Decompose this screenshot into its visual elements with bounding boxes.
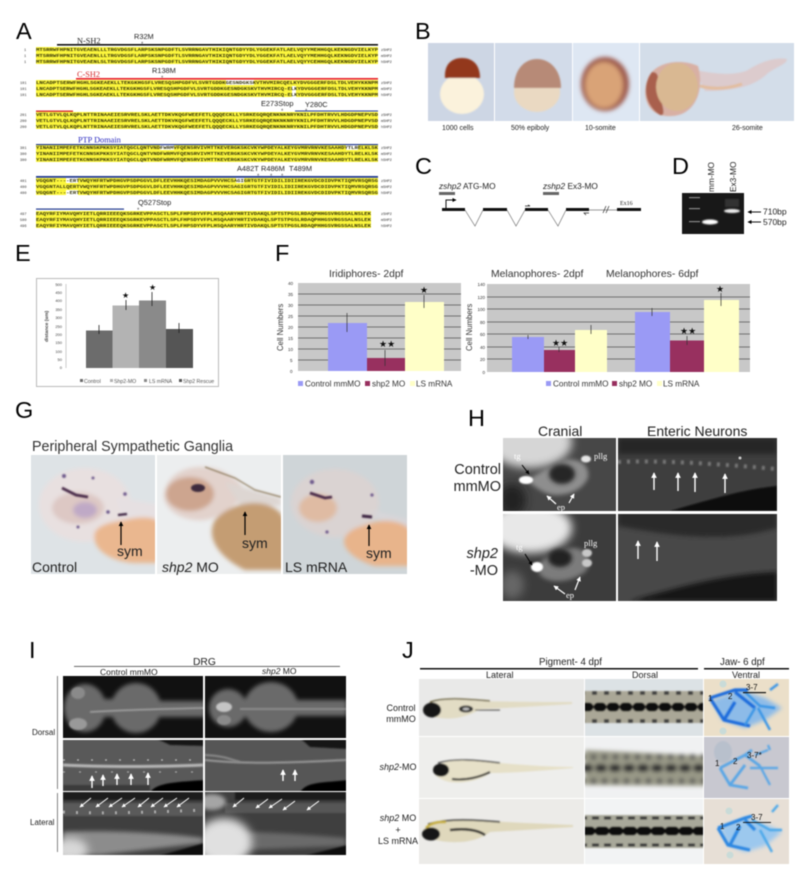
panel A: sequence alignment — [16, 18, 392, 229]
morpholino labels: zshp2 ATG-MO — [438, 181, 496, 191]
morpholino labels: Ex16 — [620, 201, 633, 207]
row labels: LS mRNA — [378, 836, 418, 846]
embryo: 1000 cells — [440, 58, 484, 114]
aligned sequences: YINANIIMPEFETKCNNSKPKKSYIATQGCLQNTVNDFWRMVFQENSRVIVMTTKEVERGKSKCVKYWPDEYALKEYGVMRVRNVKESAAHDYTLRELKLSK — [36, 147, 379, 151]
photo: control lateral — [62, 791, 204, 856]
chart titles: Melanophores- 2dpf — [491, 269, 584, 280]
panel letter J: J — [402, 637, 414, 663]
y axis — [44, 282, 66, 370]
y axis: 200 — [55, 332, 63, 337]
jaw cartilage photo: rescue: 1 — [720, 822, 725, 831]
photo: shp2 MO — [157, 455, 285, 574]
group headings: Ventral — [732, 670, 760, 680]
panel G: peripheral sympathetic ganglia — [15, 397, 412, 575]
group headings: Lateral — [486, 670, 514, 680]
error bars and stars: ★ — [149, 283, 156, 292]
stage captions: 1000 cells — [442, 125, 474, 132]
lateral photos background — [419, 679, 584, 864]
panel I: DRG fluorescence — [29, 637, 348, 866]
error bars and stars: ★ — [122, 291, 129, 300]
chart: Melanophores — [465, 269, 750, 388]
residue numbers — [20, 49, 26, 229]
photo labels: LS mRNA — [285, 559, 348, 575]
species labels: hSHP2 — [381, 191, 392, 196]
mutation stars: * — [305, 109, 308, 115]
mutation labels: Q527Stop — [138, 198, 171, 207]
legend: LS mRNA — [663, 380, 700, 388]
jaw cartilage photo: shp2 MO: 2 — [733, 757, 738, 766]
mutation stars: * — [257, 174, 260, 180]
jaw cartilage photo: shp2 MO: 1 — [715, 759, 720, 768]
embryo: 50% epiboly — [514, 59, 561, 112]
row labels: -MO — [470, 563, 498, 579]
species labels: zSHP2 — [381, 147, 392, 151]
y axis: 250 — [55, 324, 63, 329]
morpholino labels: zshp2 Ex3-MO — [542, 181, 598, 191]
panel H: cranial and enteric neurons — [453, 405, 777, 601]
heading: Peripheral Sympathetic Ganglia — [32, 439, 233, 455]
start site arrow — [446, 200, 456, 208]
residue numbers: 200 — [20, 120, 26, 124]
stage captions: 50% epiboly — [511, 125, 550, 132]
mutation labels: Y280C — [305, 100, 328, 109]
aligned sequences: LNCADPTSERWFHGHLSGKEAEKLLTEKGKHGSFLVRESQSHPGDFVLSVRTGDDKGESNDGKSKVTHVMIRCQELKYDVGGGERFDSLTDLVEHYKKNPM — [36, 82, 379, 86]
photo: shp2 dorsal close-up — [205, 738, 348, 793]
dorsal pigment photos — [580, 679, 710, 864]
y axis labels: 5 — [290, 358, 293, 363]
error bars — [347, 295, 424, 366]
significance stars: ★★ — [680, 326, 696, 336]
y axis: 100 — [55, 349, 63, 354]
panel letter F: F — [275, 240, 289, 266]
error bars and stars — [99, 283, 179, 334]
jaw cartilage photo: rescue: 3-7 — [751, 813, 763, 822]
legend — [298, 380, 453, 388]
legend — [546, 380, 700, 388]
significance stars: ★ — [420, 285, 428, 295]
embryo: 10-somite — [581, 57, 629, 111]
DRG heading: shp2 MO — [262, 666, 297, 676]
significance stars: ★ — [716, 284, 724, 294]
residue numbers: 101 — [20, 88, 26, 92]
species labels: mSHP2 — [381, 120, 392, 124]
y axis: 400 — [55, 298, 63, 303]
y axis labels: 20 — [288, 325, 294, 330]
column headings: Cranial — [538, 423, 582, 439]
fish: rescue lateral — [422, 820, 573, 842]
aligned sequences: EAQYRFIYMAVQHYIETLQRRIEEEQKSGRKEVPPASCTLSPLFHPSDYVFPLHSQAARYHRTIVDAKQLSPTSTPGSLRDAQPHHGSVRGSSALNSLEK — [36, 225, 372, 229]
panel J: pigment and jaw — [378, 637, 789, 864]
y axis labels: 0 — [482, 370, 485, 375]
chart frame — [36, 278, 218, 386]
y axis: 350 — [55, 307, 63, 312]
photo: shp2 lateral — [204, 791, 347, 856]
chart title: Iridiphores- 2dpf — [329, 269, 404, 280]
panel D: RT-PCR gel — [672, 153, 787, 234]
row labels: mmMO — [386, 714, 416, 724]
morpholino labels — [438, 181, 633, 207]
y axis labels: 20 — [480, 357, 485, 362]
photo: control dorsal close-up — [63, 738, 205, 793]
aligned sequences: VGQGNT----ERTVWQYHFRTWPDHGVPSDPGGVLDFLEEVHHKQESIMDAGPVVVHCSAGIGRTGTFIVIDILIDIIREKGVDCDIDVPKTIQMVRSQRSG — [36, 180, 379, 184]
fish: control lateral — [423, 699, 572, 719]
cranial annotations: tg — [514, 451, 521, 461]
mutation labels: R32M — [134, 32, 154, 41]
aligned sequences: MTSRRWFHPNITGVEAENLLLTRGVDGSFLARPSKSNPGDFTLSVRRNGAVTHIKIQNTGDYYDLYGGEKFATLAELVQYYMEHHGQLKEKNGDVIELKYP — [36, 55, 379, 59]
stage captions: 10-somite — [585, 125, 616, 132]
residue numbers: 500 — [20, 219, 26, 223]
aligned sequences: VETLGTVLQLKQPLNTTRINAAEIESRVRELSKLAETTDKVKQGFWEEFETLQQQECKLLYSRKEGQRQENKNKNRYKNILPFDHTRVVLHDGDPNEPVSD — [36, 126, 379, 130]
panel C: gene structure diagram — [415, 153, 641, 226]
residue numbers: 101 — [20, 94, 26, 98]
band size labels: 710bp — [763, 206, 787, 216]
jaw cartilage photo: rescue: 2 — [736, 823, 741, 832]
residue numbers: 400 — [20, 192, 26, 196]
DRG heading: DRG — [193, 657, 216, 668]
DRG heading: Control mmMO — [100, 667, 158, 677]
y axis: 500 — [55, 282, 63, 287]
lane labels — [706, 161, 738, 192]
y axis labels: 40 — [480, 345, 485, 350]
mutation labels — [134, 32, 328, 207]
mutation stars: * — [281, 109, 284, 115]
aligned sequences: VGQGNTALLQERTVWQYHFRTWPDHGVPSDPGGVLDFLEEVHHKQESIMDAGPVVVHCSAGIGRTGTFIVIDILIDIIREKGVDCDIDVPKTIQMVRSQRSG — [36, 186, 379, 190]
band size labels: 570bp — [763, 217, 787, 227]
y axis: 150 — [55, 340, 63, 345]
species labels: zSHP2 — [381, 82, 392, 86]
residue numbers: 200 — [20, 126, 26, 130]
residue numbers: 300 — [20, 159, 26, 163]
y axis labels: 30 — [288, 303, 294, 308]
domain bars — [36, 44, 378, 210]
legend: shp2 MO — [372, 380, 405, 388]
y axis labels — [465, 282, 485, 375]
photo: cranial control — [502, 437, 617, 512]
species labels: mSHP2 — [381, 55, 392, 59]
embryo: 26-somite — [645, 59, 787, 116]
aligned sequences: YINANIIMPEFETKCNNSKPKKSYIATQGCLQNTVNDFWRMVFQENSRVIVMTTKEVERGKSKCVKYWPDEYALKEYGVMRVRNVKESAAHDYTLRELKLSK — [36, 159, 379, 163]
gel image — [682, 193, 744, 234]
panel letter A: A — [16, 18, 32, 44]
photo labels: Control — [32, 559, 77, 575]
species labels: hSHP2 — [381, 125, 392, 130]
row labels: shp2 — [467, 546, 498, 562]
species labels: zSHP2 — [381, 49, 392, 53]
bars — [512, 300, 739, 372]
row labels: Lateral — [30, 818, 55, 827]
y axis: 0 — [60, 365, 63, 370]
legend: Shp2-MO — [114, 379, 136, 385]
bars — [86, 300, 193, 368]
row labels — [453, 462, 501, 579]
photo labels — [32, 535, 392, 575]
mutation stars: * — [281, 174, 284, 180]
legend: LS mRNA — [416, 380, 453, 388]
y axis labels: 100 — [477, 307, 485, 312]
grid lines — [298, 294, 461, 360]
legend: Control mmMO — [553, 380, 608, 388]
residue numbers: 300 — [20, 153, 26, 157]
legend — [80, 379, 214, 385]
row labels: + — [395, 825, 401, 835]
row labels: shp2 MO — [380, 813, 416, 823]
y axis labels: 0 — [290, 369, 293, 374]
panel B: whole-mount embryo stages — [415, 18, 794, 132]
mutation labels: E273Stop — [261, 99, 293, 108]
photo: Control — [31, 455, 160, 574]
photo: LS mRNA — [283, 455, 412, 574]
stage captions: 26-somite — [732, 125, 763, 132]
aligned sequences: EAQYRFIYMAVQHYIETLQRRIEEEQKSGRKEVPPASCTLSPLFHPSDYVFPLHSQAARYHRTIVDAKQLSPTSTPGSLRDAQPHHGSVRGSSALNSLEK — [36, 213, 372, 217]
legend: Shp2 Rescue — [183, 379, 214, 385]
panel letter B: B — [415, 18, 431, 44]
panel letter D: D — [672, 153, 689, 179]
alignment gaps — [66, 80, 358, 195]
photo: shp2 dorsal — [205, 676, 347, 738]
y axis: 450 — [55, 290, 63, 295]
cranial annotations: pllg — [584, 538, 598, 548]
residue numbers: 1 — [24, 55, 26, 59]
residue numbers: 301 — [20, 147, 26, 151]
cranial annotations: pllg — [594, 451, 608, 461]
chart titles — [491, 269, 699, 280]
panel letter I: I — [29, 637, 36, 663]
row labels — [378, 703, 418, 846]
species labels: hSHP2 — [381, 224, 392, 229]
morpholino bars — [439, 192, 559, 195]
photo: enteric control — [618, 438, 777, 511]
domain names: C-SH2 — [77, 70, 100, 79]
significance stars — [552, 284, 724, 348]
y axis labels: Cell Numbers — [276, 304, 285, 351]
panel letter C: C — [415, 153, 432, 179]
jaw cartilage photo: shp2 MO: 3-7* — [747, 751, 762, 760]
aligned sequences: LNCADPTSERWFHGHLSGKEAEKLLTEKGKHGSFLVRESQSHPGDFVLSVRTGDDKGESNDGKSKVTHVMIRCQ-ELKYDVGGGERFDSLTDLVEHYKKNPM — [36, 94, 379, 98]
mutation stars: * — [161, 76, 164, 82]
y axis labels: 25 — [288, 314, 294, 319]
residue numbers: 401 — [20, 180, 26, 184]
alignment yellow background — [36, 47, 378, 228]
aligned sequences: VGQGNT----ERTVWQYHFRTWPDHGVPSDPGGVLDFLEEVHHKQESIMDAGPVVVHCSAGIGRTGTFIVIDILIDIIREKGVDCDIDVPKTIQMVRSQRSG — [36, 192, 379, 196]
y axis labels: Cell Numbers — [465, 304, 474, 351]
group headings — [420, 657, 789, 680]
residue numbers: 101 — [20, 82, 26, 86]
residue numbers: 1 — [24, 61, 26, 65]
mutation labels: A482T — [237, 164, 259, 173]
significance stars: ★★ — [552, 338, 568, 348]
significance stars — [379, 285, 428, 349]
jaw cartilage photo: control: 3-7 — [746, 683, 758, 692]
aligned sequences: VETLGTVLQLKQPLNTTRINAAEIESRVRELSKLAETTDKVKQGFWEEFETLQQQECKLLYSRKEGQRQENKNKNRYKNILPFDHTRVVLHDGDPNEPVSD — [36, 120, 379, 124]
photo strip background — [428, 43, 794, 121]
mutation stars — [137, 42, 308, 214]
panel F: pigment cell count charts — [275, 240, 750, 388]
species labels: hSHP2 — [381, 60, 392, 65]
domain names: N-SH2 — [77, 36, 101, 46]
species labels: hSHP2 — [381, 93, 392, 98]
jaw cartilage photo: control — [704, 679, 789, 736]
plot background — [487, 284, 750, 372]
cranial annotations — [514, 451, 608, 600]
row labels: mmMO — [453, 479, 501, 495]
aligned sequences: VETLGTVLQLKQPLNTTRINAAEIESRVRELSKLAETTDKVKQGFWEEFETLQQQECKLLYSRKEGQRQENKNKNRYKNILPFDHTRVVLHDGDPNEPVSD — [36, 114, 379, 118]
chart titles: Melanophores- 6dpf — [606, 269, 699, 280]
panel letter G: G — [15, 397, 33, 423]
DRG heading — [74, 657, 340, 677]
group headings: Dorsal — [632, 670, 658, 680]
panel letter H: H — [468, 405, 485, 431]
y axis labels: 15 — [288, 336, 294, 341]
species labels: mSHP2 — [381, 88, 392, 92]
jaw cartilage photo: shp2 MO — [704, 737, 789, 798]
jaw cartilage photo: control: 2 — [728, 692, 733, 701]
photo labels: sym — [117, 543, 143, 559]
mutation labels: T489M — [289, 164, 312, 173]
aligned sequences: EAQYRFIYMAVQHYIETLQRRIEEEQKSGRKEVPPASCTLSPLFHPSDYVFPLHSQAARYHRTIVDAKQLSPTSTPGSLRDAQPHHGSVRGSSALNSLEK — [36, 219, 372, 223]
y axis labels: 10 — [288, 347, 294, 352]
species labels: mSHP2 — [381, 153, 392, 157]
column headings — [538, 423, 747, 439]
photo labels: sym — [366, 545, 392, 561]
row labels: Dorsal — [32, 728, 55, 737]
chart: Iridiophores 2dpf — [276, 269, 461, 388]
legend: LS mRNA — [149, 379, 173, 385]
cranial annotations: ep — [557, 502, 565, 512]
y axis labels: 40 — [288, 281, 294, 286]
species labels: zSHP2 — [381, 180, 392, 184]
photo: enteric shp2-MO — [618, 510, 777, 601]
row labels: shp2-MO — [379, 762, 417, 772]
cranial annotations: ep — [566, 590, 574, 600]
y axis labels: 140 — [477, 282, 485, 287]
y axis: 300 — [55, 315, 63, 320]
y axis labels — [276, 281, 294, 374]
mutation labels: R138M — [152, 66, 176, 75]
mutation labels: R486M — [261, 164, 285, 173]
mutation stars: * — [141, 42, 144, 48]
grid lines — [487, 297, 750, 359]
legend: Control — [84, 379, 101, 385]
y axis labels: 120 — [477, 295, 485, 300]
group headings: Jaw- 6 dpf — [720, 657, 765, 668]
aligned sequences — [36, 49, 379, 229]
residue numbers: 497 — [20, 213, 26, 217]
fish: shp2 lateral — [433, 760, 573, 783]
residue numbers: 496 — [20, 225, 26, 229]
mutation stars: * — [270, 174, 273, 180]
y axis labels: 80 — [480, 320, 485, 325]
cranial annotations: tg — [516, 542, 523, 552]
species labels — [381, 49, 392, 229]
exons and introns — [442, 206, 641, 226]
y axis: 50 — [58, 357, 63, 362]
lane labels: mm-MO — [706, 162, 716, 192]
y axis labels: 60 — [480, 332, 485, 337]
mutation stars: * — [137, 208, 140, 214]
residue numbers: 201 — [20, 114, 26, 118]
plot background — [298, 283, 461, 371]
species labels: mSHP2 — [381, 219, 392, 223]
group headings: Pigment- 4 dpf — [539, 657, 602, 668]
significance stars: ★★ — [379, 339, 395, 349]
residue numbers: 1 — [24, 49, 26, 53]
photo: control dorsal — [63, 676, 205, 738]
photo: cranial shp2-MO — [502, 513, 617, 602]
aligned sequences: MTSRRWFHPNITGVEAENLLLTRGVDGSFLARPSKSNPGDFTLSVRRNGAVTHIKIQNTGDYYDLYGGEKFATLAELVQYYMEHHGQLKEKNGDVIELKYP — [36, 49, 379, 53]
species labels: mSHP2 — [381, 186, 392, 190]
row labels: Control — [454, 462, 501, 478]
legend: Control mmMO — [305, 380, 360, 388]
domain names: PTP Domain — [78, 136, 122, 144]
aligned sequences: YINANIIMPEFETKCNNSKPKKSYIATQGCLQNTVNDFWRMVFQENSRVIVMTTKEVERGKSKCVKYWPDEYALKEYGVMRVRNVKESAAHDYTLRELKLSK — [36, 153, 379, 157]
jaw cartilage photo: rescue — [704, 799, 789, 864]
row labels: Control — [386, 703, 416, 713]
species labels: hSHP2 — [381, 158, 392, 163]
error bars — [528, 293, 721, 352]
row labels — [30, 676, 58, 852]
panel E: distance bar chart — [15, 240, 218, 386]
column headings: Enteric Neurons — [647, 423, 747, 439]
photo labels: sym — [242, 535, 268, 551]
legend: shp2 MO — [619, 380, 652, 388]
aligned sequences: LNCADPTSERWFHGHLSGKEAEKLLTEKGKHGSFLVRESQSHPGDFVLSVRTGDDKGESNDGKSKVTHVMIRCQ-ELKYDVGGGERFDSLTDLVEHYKKNPM — [36, 88, 379, 92]
species labels: zSHP2 — [381, 213, 392, 217]
species labels: zSHP2 — [381, 114, 392, 118]
residue numbers: 400 — [20, 186, 26, 190]
primers — [525, 205, 589, 215]
stage captions — [442, 125, 763, 132]
bars — [328, 302, 444, 371]
y axis labels: 35 — [288, 292, 294, 297]
lane labels: Ex3-MO — [728, 161, 738, 192]
domain names — [77, 36, 122, 144]
y axis: distance (um) — [44, 310, 50, 342]
photo labels: shp2 MO — [162, 559, 219, 575]
band size labels — [748, 206, 787, 227]
jaw cartilage photo: control: 1 — [708, 694, 713, 703]
panel letter E: E — [15, 240, 31, 266]
aligned sequences: MTSRRWFHPNITGVEAENLSLTRGVDGSFLARPSKSNPGDFTLSVRRNGAVTHIKIQNTGDYYDLYGGEKFATLAELVQYYCEHHGQLKEKNGDVIELKYP — [36, 61, 379, 65]
